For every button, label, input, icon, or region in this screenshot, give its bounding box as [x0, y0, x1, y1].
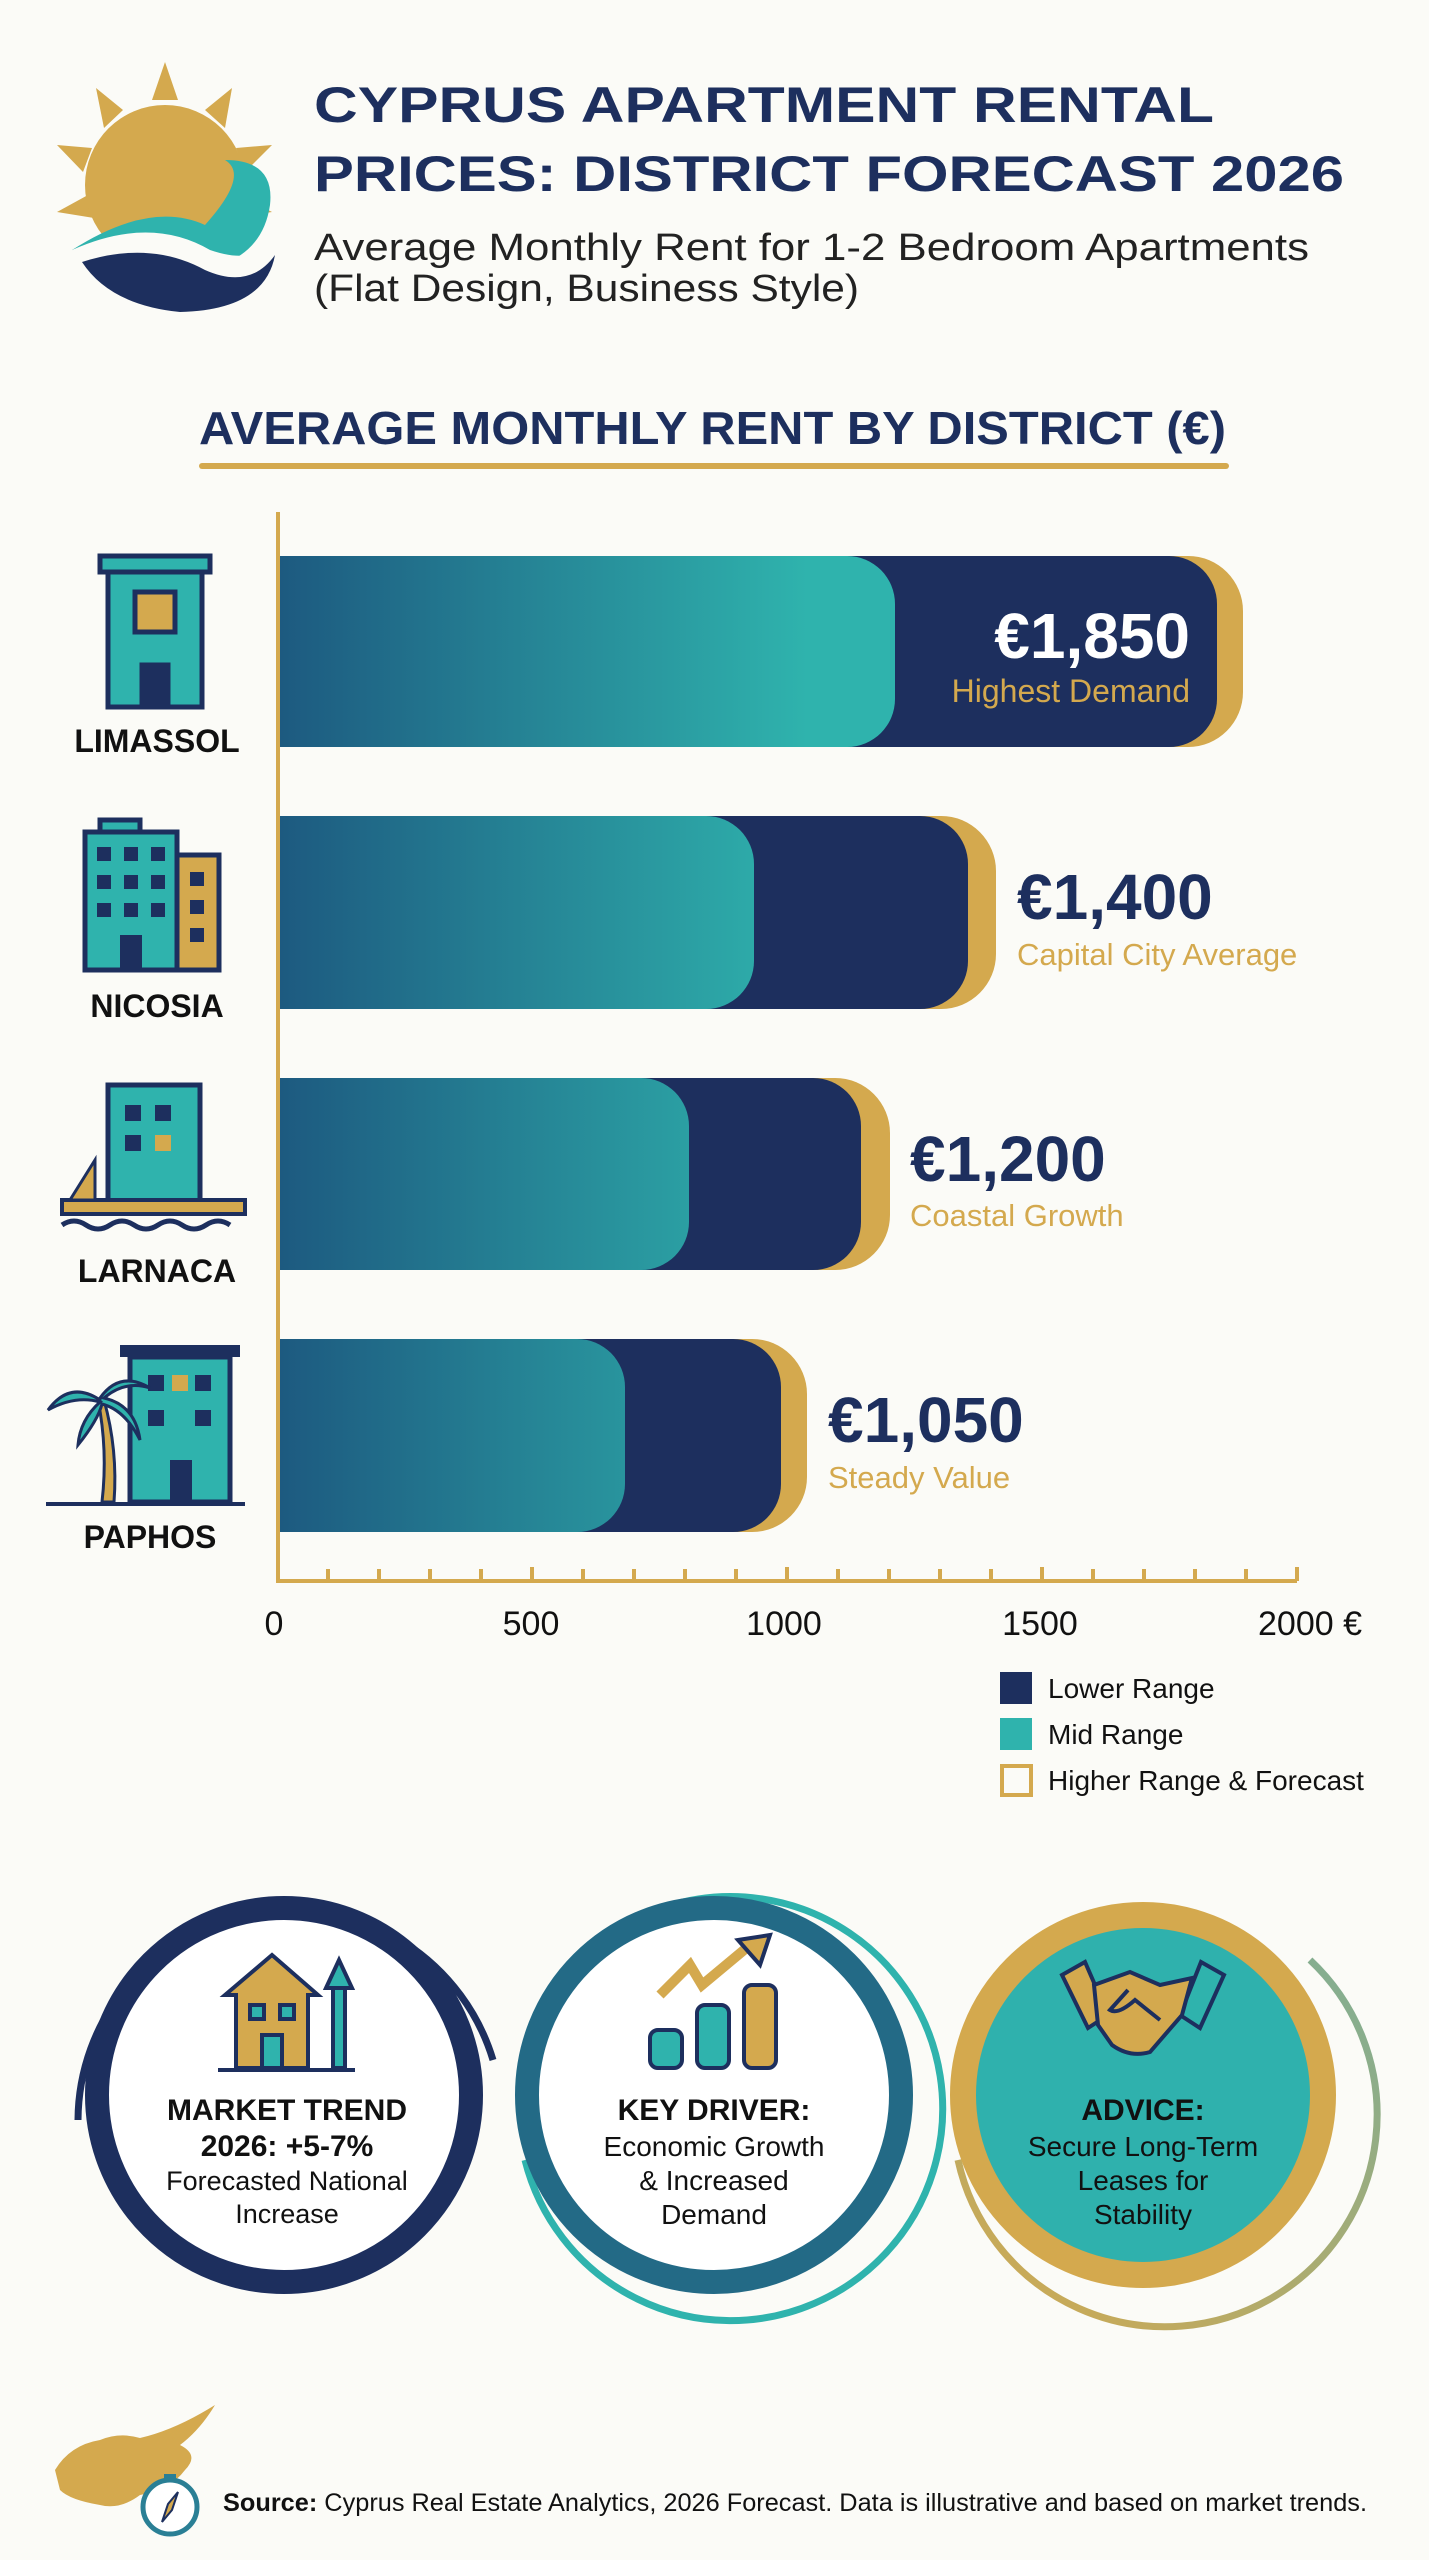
icon: house with arrow: [218, 1955, 355, 2070]
circle: advice: [958, 1915, 1377, 2327]
axis labels: 1500: [1002, 1605, 1078, 1643]
circle: key driver: KEY DRIVER:: [618, 2094, 810, 2127]
bar: Nicosia: €1,400: [1017, 861, 1213, 933]
circle: advice: ADVICE:: [1081, 2094, 1205, 2127]
bar: Paphos: €1,050: [828, 1384, 1024, 1456]
district labels: [74, 723, 240, 1555]
circle: market trend: Increase: [235, 2199, 339, 2229]
circle: market trend: 2026: +5-7%: [201, 2130, 373, 2163]
bar: Larnaca: Coastal Growth: [910, 1198, 1124, 1233]
title: [314, 77, 1344, 202]
legend: [1000, 1672, 1364, 1796]
subtitle: [314, 227, 1309, 310]
title: PRICES: DISTRICT FORECAST 2026: [314, 146, 1344, 202]
icon: growth arrow and coins: [650, 1935, 776, 2068]
icon: Cyprus map with compass: [55, 2405, 215, 2534]
title: CYPRUS APARTMENT RENTAL: [314, 77, 1214, 133]
logo: sun and wave: [57, 62, 275, 312]
axis labels: 1000: [746, 1605, 822, 1643]
district labels: LARNACA: [78, 1253, 236, 1289]
icon: Paphos building with palm: [46, 1345, 245, 1504]
axis labels: [265, 1605, 1362, 1643]
bar: Larnaca: [280, 1078, 1124, 1270]
chart axes: [276, 512, 1297, 1583]
bar: Paphos: [280, 1339, 1024, 1532]
circle: key driver: Economic Growth: [604, 2131, 824, 2162]
district labels: NICOSIA: [90, 988, 224, 1024]
circle: key driver: [525, 1897, 943, 2321]
district labels: PAPHOS: [84, 1519, 216, 1555]
bar: Limassol: [280, 556, 1243, 747]
axis labels: 500: [503, 1605, 559, 1643]
circle: market trend: Forecasted National: [166, 2166, 408, 2196]
bar: Nicosia: [280, 816, 1297, 1009]
circle: advice: Stability: [1094, 2199, 1192, 2230]
bar: Larnaca: €1,200: [910, 1123, 1106, 1195]
bar: Paphos: Steady Value: [828, 1460, 1010, 1495]
section heading: AVERAGE MONTHLY RENT BY DISTRICT (€): [199, 402, 1226, 454]
subtitle: (Flat Design, Business Style): [314, 268, 859, 310]
bar: Limassol: €1,850: [994, 600, 1190, 672]
axis labels: 0: [265, 1605, 283, 1643]
legend: Mid Range: [1048, 1719, 1183, 1750]
icon: Nicosia buildings: [85, 820, 219, 970]
bar: Limassol: Highest Demand: [952, 673, 1190, 709]
icon: Larnaca building with boat: [62, 1085, 245, 1229]
circle: market trend: MARKET TREND: [167, 2094, 407, 2127]
circle: advice: Leases for: [1078, 2165, 1208, 2196]
circle: key driver: & Increased: [639, 2165, 789, 2196]
source text: Source: Cyprus Real Estate Analytics, 2026 Forecast. Data is illustrative and based on market trends.: [223, 2489, 1367, 2517]
subtitle: Average Monthly Rent for 1-2 Bedroom Apartments: [314, 227, 1309, 269]
icon: handshake: [1062, 1962, 1224, 2054]
axis labels: 2000 €: [1258, 1605, 1362, 1643]
district labels: LIMASSOL: [74, 723, 240, 759]
circle: market trend: [78, 1908, 493, 2282]
circle: advice: Secure Long-Term: [1028, 2131, 1258, 2162]
bar: Nicosia: Capital City Average: [1017, 937, 1297, 972]
legend: Higher Range & Forecast: [1048, 1765, 1364, 1796]
legend: Lower Range: [1048, 1673, 1215, 1704]
circle: key driver: Demand: [661, 2199, 767, 2230]
icon: Limassol building: [100, 556, 210, 707]
